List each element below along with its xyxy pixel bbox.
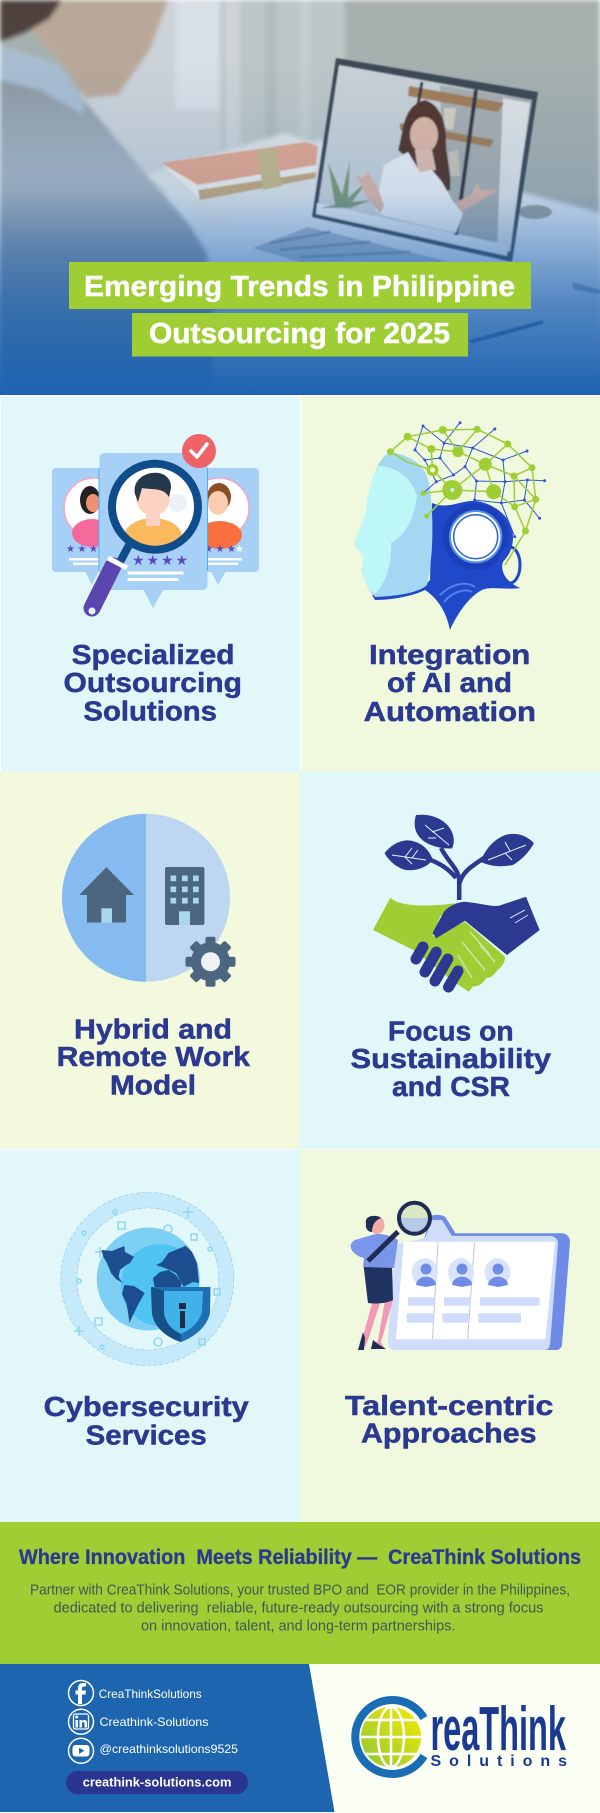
icon: handshake with plant bbox=[373, 815, 540, 992]
heading: integration of AI and automation: Automation bbox=[364, 696, 536, 727]
icon: candidate profile cards with magnifier: ★★★ bbox=[66, 544, 98, 555]
website button: creathink-solutions.com bbox=[83, 1774, 232, 1790]
icon: linkedin bbox=[68, 1709, 94, 1734]
panel: focus on sustainability and CSR bbox=[300, 771, 600, 1149]
youtube handle: @creathinksolutions9525 bbox=[100, 1742, 238, 1756]
icon: candidate profile cards with magnifier bbox=[52, 434, 259, 614]
icon: home and office split circle with gear bbox=[62, 814, 236, 987]
laptop frame bbox=[312, 58, 538, 262]
heading: cybersecurity services bbox=[44, 1391, 249, 1450]
facebook handle: CreaThinkSolutions bbox=[99, 1687, 202, 1701]
panel: specialized outsourcing solutions bbox=[1, 396, 300, 772]
band heading: Where Innovation Meets Reliability — CreaThink Solutions bbox=[19, 1546, 581, 1569]
papers under notebook bbox=[148, 132, 310, 192]
logo: CreaThink Solutions: Solutions bbox=[430, 1753, 567, 1770]
desk hole bbox=[518, 205, 552, 219]
heading: cybersecurity services: Cybersecurity bbox=[44, 1391, 249, 1422]
icon: facebook bbox=[68, 1680, 94, 1706]
panel: integration of AI and automation bbox=[301, 396, 600, 771]
heading: integration of AI and automation bbox=[364, 639, 536, 727]
heading: integration of AI and automation: of AI and bbox=[387, 667, 512, 698]
heading: hybrid and remote work model bbox=[57, 1014, 250, 1101]
laptop screen bbox=[318, 64, 532, 232]
heading: focus on sustainability and CSR bbox=[350, 1016, 551, 1102]
woman on screen bbox=[398, 100, 450, 194]
heading: talent-centric approaches bbox=[345, 1390, 553, 1449]
heading: focus on sustainability and CSR: and CSR bbox=[392, 1071, 510, 1102]
heading: specialized outsourcing solutions: Outsourcing bbox=[64, 667, 242, 698]
heading: specialized outsourcing solutions: Specialized bbox=[72, 639, 235, 670]
title: Outsourcing for 2025 bbox=[149, 318, 450, 350]
panel: hybrid and remote work model bbox=[0, 772, 300, 1149]
heading: integration of AI and automation: Integration bbox=[369, 639, 530, 670]
icon: candidate profile cards with magnifier: ★★★ bbox=[204, 544, 236, 555]
band description: dedicated to delivering reliable, future-ready outsourcing with a strong focus bbox=[54, 1600, 543, 1617]
desk accessories bbox=[470, 282, 600, 342]
band description bbox=[30, 1582, 570, 1635]
heading: hybrid and remote work model: Hybrid and bbox=[74, 1014, 232, 1045]
panel: footer bbox=[0, 1664, 600, 1813]
heading: focus on sustainability and CSR: Focus on bbox=[388, 1016, 514, 1047]
band description: on innovation, talent, and long-term partnerships. bbox=[141, 1618, 455, 1635]
hero photo bbox=[0, 0, 600, 395]
title bbox=[69, 262, 531, 356]
icon: candidate profile cards with magnifier: ★ bbox=[235, 544, 244, 555]
website button bbox=[66, 1771, 248, 1794]
hero gradient overlay bbox=[0, 98, 600, 395]
linkedin handle: Creathink-Solutions bbox=[100, 1715, 208, 1729]
heading: hybrid and remote work model: Remote Work bbox=[57, 1041, 250, 1072]
heading: specialized outsourcing solutions bbox=[64, 639, 242, 726]
icon: globe with security shield bbox=[61, 1192, 234, 1366]
heading: hybrid and remote work model: Model bbox=[110, 1070, 196, 1101]
heading: cybersecurity services: Services bbox=[86, 1419, 207, 1450]
person jacket bbox=[0, 80, 214, 395]
icon: woman with magnifier and candidate folder bbox=[351, 1202, 570, 1350]
panel: talent-centric approaches bbox=[300, 1150, 600, 1522]
shelves bbox=[408, 86, 504, 112]
icon: candidate profile cards with magnifier: ★★★★ bbox=[132, 553, 188, 569]
logo: CreaThink Solutions bbox=[355, 1695, 567, 1774]
heading: talent-centric approaches: Approaches bbox=[361, 1418, 536, 1449]
notebook bbox=[163, 164, 316, 198]
icon: youtube bbox=[68, 1738, 94, 1763]
icon: robot head with neural network bbox=[354, 421, 546, 630]
plant bbox=[320, 160, 372, 208]
panel: cybersecurity services bbox=[0, 1150, 300, 1522]
heading: specialized outsourcing solutions: Solutions bbox=[83, 696, 217, 726]
heading: focus on sustainability and CSR: Sustainability bbox=[350, 1043, 551, 1074]
keyboard bbox=[253, 227, 450, 262]
heading: talent-centric approaches: Talent-centric bbox=[345, 1390, 553, 1421]
title: Emerging Trends in Philippine bbox=[84, 271, 515, 303]
panel: call to action band bbox=[0, 1522, 600, 1664]
